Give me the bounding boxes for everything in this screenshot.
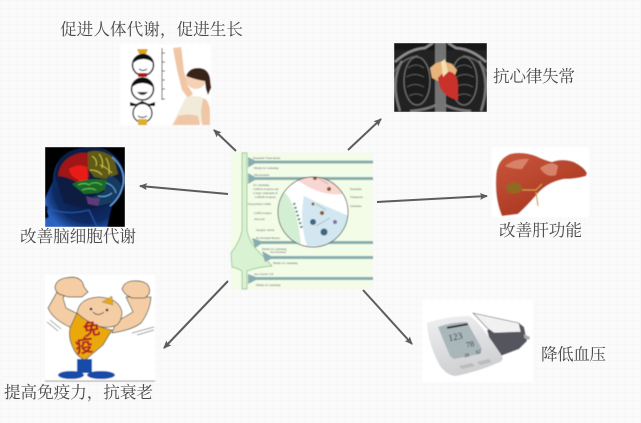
arrow: to heart bbox=[348, 119, 381, 150]
image: glowing brain bbox=[45, 147, 125, 227]
image: immunity mascot: 疫 bbox=[73, 331, 95, 359]
tiny diagram labels: A2 containing bbox=[253, 184, 270, 187]
image: heart x-ray bbox=[394, 43, 487, 112]
tiny diagram labels: Mainly A2 containing bbox=[256, 284, 281, 287]
panel: central neuron diagram bbox=[231, 153, 373, 289]
label: improve brain cell metabolism: 改善脑细胞代谢 bbox=[20, 227, 136, 246]
tiny diagram labels: Mainly A2 containing bbox=[262, 248, 287, 251]
monitor readings: 123 bbox=[448, 331, 464, 344]
image: child height chart bbox=[120, 44, 211, 125]
tiny diagram labels: Astrocyte bbox=[254, 218, 266, 221]
image: immunity mascot bbox=[45, 275, 155, 381]
label: lower blood pressure: 降低血压 bbox=[541, 345, 606, 364]
label: anti-arrhythmia: 抗心律失常 bbox=[493, 67, 575, 86]
arrow: to brain bbox=[140, 186, 228, 194]
neuron body bbox=[231, 153, 272, 289]
synapse circle bbox=[278, 177, 348, 247]
tiny diagram labels: Transporter bbox=[350, 196, 363, 199]
monitor readings: 28 bbox=[464, 353, 471, 359]
label: boost immunity, anti-aging: 提高免疫力，抗衰老 bbox=[4, 383, 153, 402]
monitor readings: 78 bbox=[465, 339, 475, 350]
tiny diagram labels: Axo-Proximal bbox=[270, 251, 286, 254]
monitor readings bbox=[448, 328, 482, 362]
tiny diagram labels: Synaptic vesicle bbox=[256, 229, 275, 232]
tiny diagram labels: Extracellular GABA bbox=[248, 203, 271, 206]
axon bars bbox=[248, 157, 373, 284]
label: improve liver function: 改善肝功能 bbox=[499, 221, 582, 240]
tiny diagram labels: Pre-Proximal Bouton bbox=[256, 237, 280, 240]
arrow: to immunity bbox=[164, 281, 228, 348]
tiny diagram labels: Mitochondria bbox=[254, 174, 270, 177]
tiny diagram labels: Glutamate bbox=[350, 205, 362, 208]
tiny diagram labels: Dopamine Transcriptase bbox=[253, 157, 281, 160]
arrow: to growth bbox=[214, 130, 236, 151]
tiny diagram labels: Dopamine bbox=[350, 188, 362, 191]
tiny diagram labels: Mainly A2 containing bbox=[254, 167, 279, 170]
arrow: to liver bbox=[377, 196, 487, 202]
tiny diagram labels: GABA receptor bbox=[254, 212, 272, 215]
tiny diagram labels: GABAA receptors and bbox=[253, 188, 279, 191]
image: liver bbox=[492, 147, 589, 217]
image: blood pressure monitor bbox=[422, 300, 533, 382]
tiny diagram labels: a larger component of bbox=[253, 192, 278, 195]
tiny diagram labels bbox=[248, 157, 363, 287]
title: promote metabolism and growth: 促进人体代谢，促进生长 bbox=[60, 20, 243, 39]
tiny diagram labels: Axo-Axonic Cell bbox=[254, 273, 274, 276]
mascot badge text: 免 bbox=[81, 314, 102, 341]
tiny diagram labels: GABAB receptors bbox=[255, 196, 276, 199]
tiny diagram labels: Mainly A2 containing bbox=[273, 262, 298, 265]
monitor readings: 82 bbox=[476, 350, 482, 356]
arrow: to blood pressure bbox=[363, 290, 412, 344]
